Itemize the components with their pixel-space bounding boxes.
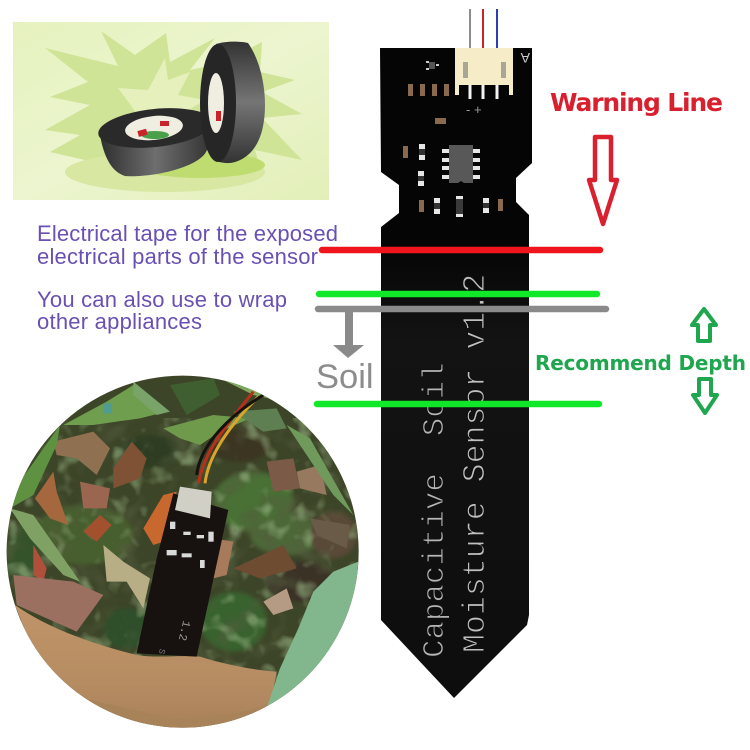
text: wrap appliances note: You can also use to wrap xyxy=(37,287,287,312)
tape roll lying flat xyxy=(96,103,214,176)
starburst centre xyxy=(118,58,205,118)
tape roll standing xyxy=(200,42,265,163)
warning line label: Warning Line xyxy=(550,88,723,117)
transistor xyxy=(426,61,439,70)
ground shadow xyxy=(65,152,265,192)
recommended depth upper line xyxy=(319,291,597,297)
arrow: soil direction xyxy=(333,309,364,358)
arrow: warning down xyxy=(589,137,617,224)
text: electrical tape note: electrical parts of the sensor xyxy=(37,244,318,269)
soil label: Soil xyxy=(316,358,374,396)
large green leaf right xyxy=(267,562,358,708)
soil level line xyxy=(318,306,606,312)
capacitors xyxy=(418,144,489,217)
photo: sensor in plant pot xyxy=(0,375,367,742)
resistors xyxy=(403,84,503,212)
pot shading xyxy=(85,698,258,728)
dead leaves xyxy=(13,432,350,632)
silkscreen: Capacitive Soil: Capacitive Soil xyxy=(418,362,453,658)
starburst xyxy=(45,31,302,180)
plant pot rim xyxy=(15,605,277,735)
sensor in soil xyxy=(137,487,228,657)
arrow: depth down xyxy=(693,379,717,413)
pin labels: - + xyxy=(466,102,482,117)
silkscreen: Moisture Sensor v1.2: Moisture Sensor v1.2 xyxy=(459,274,494,653)
sensor wires xyxy=(470,9,497,48)
sensor cable xyxy=(197,392,263,483)
leaf litter texture: dark xyxy=(0,418,367,685)
sensor in soil: 1.2 xyxy=(175,619,191,642)
sensor in soil: S xyxy=(156,648,167,655)
warning line xyxy=(322,247,600,253)
board mark A: A xyxy=(520,50,530,66)
text: wrap appliances note xyxy=(37,287,287,334)
recommended depth lower line xyxy=(317,401,599,407)
connector xyxy=(455,48,513,99)
arrow: depth up xyxy=(692,309,716,341)
dark foliage mottling xyxy=(7,428,357,652)
left stem leaf xyxy=(10,508,80,582)
sensor board xyxy=(380,48,532,698)
text: electrical tape note xyxy=(37,221,338,269)
text: wrap appliances note: other appliances xyxy=(37,309,202,334)
green glow under rolls xyxy=(135,152,265,178)
text: electrical tape note: Electrical tape for the exposed xyxy=(37,221,338,246)
left edge leaf xyxy=(10,425,60,508)
panel: electrical tape picture xyxy=(13,22,329,200)
leaf litter texture: green xyxy=(0,418,367,685)
chip xyxy=(442,145,480,183)
green leaves top xyxy=(63,375,287,445)
long leaf right xyxy=(287,425,353,515)
recommend depth label: Recommend Depth xyxy=(535,351,746,375)
